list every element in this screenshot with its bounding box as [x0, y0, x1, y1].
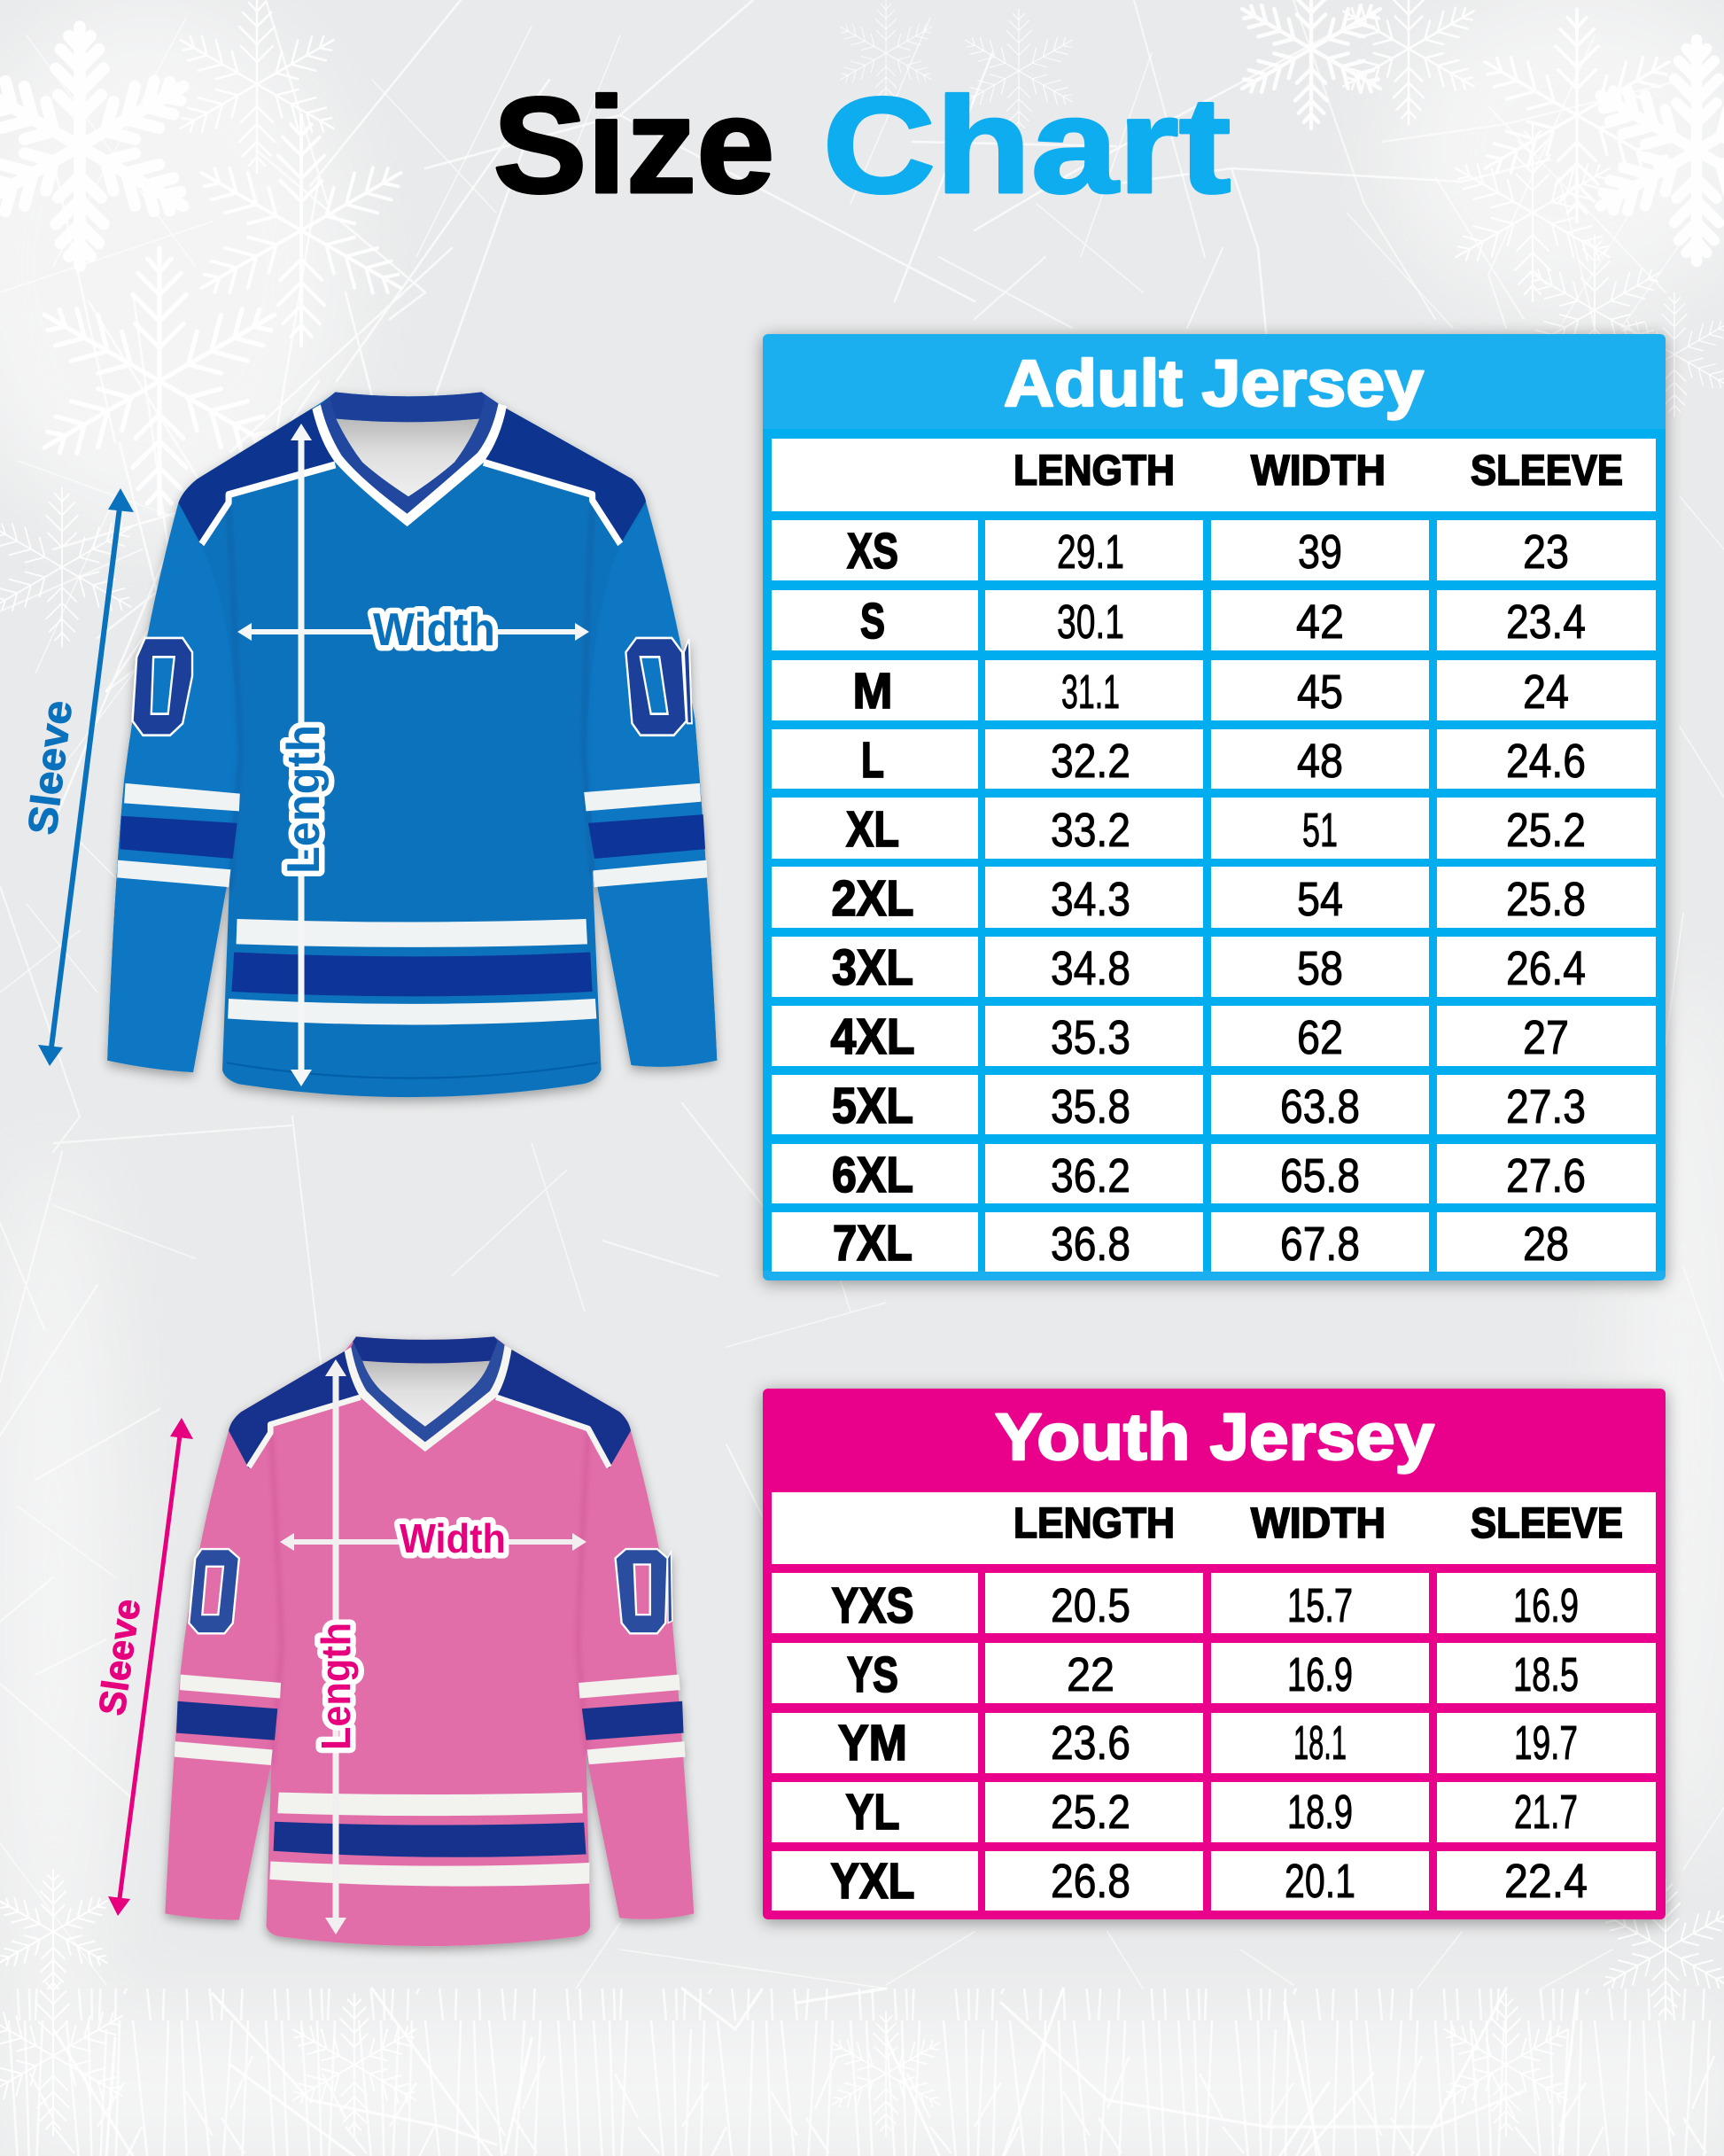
length arrow [291, 424, 312, 1086]
row 4XL [772, 1006, 1656, 1066]
row YXL [772, 1851, 1656, 1911]
row YXS [772, 1573, 1656, 1634]
header row: WIDTH [1251, 1500, 1386, 1547]
row XL: 51 [1302, 804, 1338, 857]
header row: LENGTH [1013, 1500, 1175, 1547]
row XS: 23 [1523, 525, 1569, 579]
header row [772, 439, 1656, 511]
row M: M [852, 663, 893, 720]
row 5XL: 5XL [832, 1078, 913, 1134]
row YL: 25.2 [1051, 1786, 1130, 1839]
row YXS: 20.5 [1051, 1579, 1130, 1632]
header row: SLEEVE [1471, 1500, 1623, 1547]
row XL: 33.2 [1051, 804, 1130, 857]
row YL [772, 1782, 1656, 1842]
sleeve arrow [38, 488, 134, 1066]
row L: 48 [1297, 735, 1343, 788]
row YS: 18.5 [1513, 1648, 1579, 1701]
row L [772, 729, 1656, 789]
row 6XL: 36.2 [1051, 1149, 1130, 1203]
row 3XL [772, 937, 1656, 997]
row YL: 21.7 [1514, 1786, 1578, 1839]
row 5XL: 27.3 [1506, 1080, 1586, 1133]
row 7XL: 28 [1523, 1218, 1569, 1271]
row YL: 18.9 [1287, 1786, 1353, 1839]
sleeve label: Sleeve [19, 697, 81, 837]
width arrow [237, 623, 589, 641]
row YXL: 22.4 [1504, 1855, 1588, 1908]
row S [772, 590, 1656, 650]
row YS: 16.9 [1287, 1648, 1353, 1701]
heading: adult jersey: Adult Jersey [1004, 346, 1424, 420]
row 4XL: 62 [1297, 1011, 1343, 1064]
row 3XL: 58 [1297, 942, 1343, 995]
row 7XL: 36.8 [1051, 1218, 1130, 1271]
row YS: 22 [1067, 1648, 1114, 1701]
row 2XL: 25.8 [1506, 873, 1586, 926]
row XS [772, 520, 1656, 580]
header row: SLEEVE [1471, 448, 1623, 494]
row S: S [860, 593, 885, 650]
row M: 31.1 [1061, 665, 1120, 719]
row YXS: 16.9 [1513, 1579, 1579, 1632]
row XL: XL [846, 801, 899, 858]
sleeve label: Sleeve [90, 1596, 148, 1718]
row 3XL: 3XL [832, 939, 913, 996]
jersey body: pink [165, 1336, 694, 1946]
row YXS: YXS [831, 1577, 914, 1634]
row L: 24.6 [1506, 735, 1586, 788]
row YM [772, 1713, 1656, 1773]
row 3XL: 26.4 [1506, 942, 1586, 995]
row 4XL: 35.3 [1051, 1011, 1130, 1064]
length label: Length [278, 725, 330, 874]
row XL [772, 798, 1656, 859]
pink youth jersey illustration [90, 1336, 694, 1946]
row XS: XS [847, 523, 898, 580]
row YXL: 20.1 [1285, 1855, 1355, 1908]
row YM: 23.6 [1051, 1716, 1130, 1770]
sleeve arrow [108, 1418, 193, 1916]
length label: Length [313, 1623, 359, 1750]
row YS [772, 1643, 1656, 1703]
row 6XL: 65.8 [1280, 1149, 1360, 1203]
row YXL: YXL [831, 1853, 914, 1910]
row YS: YS [847, 1646, 898, 1703]
row 6XL: 27.6 [1506, 1149, 1586, 1203]
row 2XL: 34.3 [1051, 873, 1130, 926]
blue adult jersey illustration [19, 392, 717, 1097]
row 2XL [772, 867, 1656, 928]
row 2XL: 2XL [831, 870, 914, 927]
row XS: 29.1 [1057, 525, 1124, 579]
row YM: 19.7 [1514, 1716, 1578, 1770]
row YXL: 26.8 [1051, 1855, 1130, 1908]
row S: 23.4 [1506, 595, 1586, 649]
row S: 42 [1296, 595, 1344, 649]
row YM: 18.1 [1293, 1716, 1347, 1770]
row 5XL: 63.8 [1280, 1080, 1360, 1133]
title: Size [493, 69, 774, 222]
panel: adult jersey size table [763, 334, 1666, 1280]
heading: youth jersey: Youth Jersey [995, 1400, 1434, 1474]
panel: youth jersey size table [763, 1389, 1666, 1919]
row 4XL: 4XL [831, 1008, 914, 1065]
length arrow [325, 1359, 346, 1934]
row M: 45 [1297, 665, 1343, 719]
row M [772, 660, 1656, 720]
jersey body: blue [107, 392, 717, 1097]
row YL: YL [845, 1784, 900, 1841]
width label: Width [373, 604, 495, 656]
row XS: 39 [1298, 525, 1342, 579]
row 5XL: 35.8 [1051, 1080, 1130, 1133]
row YXS: 15.7 [1287, 1579, 1353, 1632]
header row [772, 1492, 1656, 1564]
row 5XL [772, 1075, 1656, 1134]
row 6XL [772, 1144, 1656, 1203]
width arrow [280, 1533, 586, 1551]
width label: Width [400, 1515, 506, 1561]
row L: 32.2 [1051, 735, 1130, 788]
row 3XL: 34.8 [1051, 942, 1130, 995]
row 6XL: 6XL [832, 1147, 913, 1203]
row S: 30.1 [1057, 595, 1124, 649]
header row: WIDTH [1251, 448, 1386, 494]
title: Chart [822, 69, 1231, 222]
row XL: 25.2 [1506, 804, 1586, 857]
row 7XL: 67.8 [1280, 1218, 1360, 1271]
row 7XL: 7XL [833, 1215, 912, 1272]
row 4XL: 27 [1523, 1011, 1569, 1064]
row YM: YM [838, 1715, 907, 1771]
header row: LENGTH [1013, 448, 1175, 494]
row L: L [861, 732, 884, 789]
title [493, 69, 1231, 222]
row 2XL: 54 [1297, 873, 1343, 926]
row M: 24 [1523, 665, 1569, 719]
row 7XL [772, 1212, 1656, 1272]
